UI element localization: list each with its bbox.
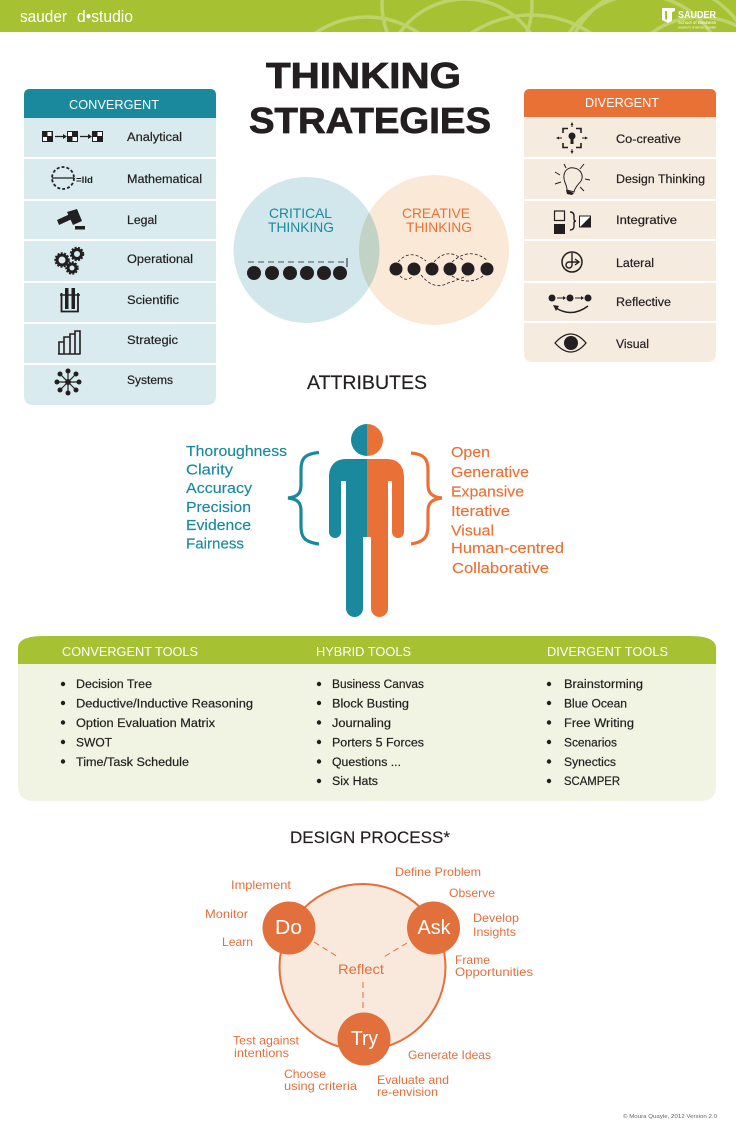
process step labels: Opportunities bbox=[455, 965, 533, 979]
column: divergent tools bbox=[547, 644, 668, 788]
attributes list: convergent: Fairness bbox=[186, 536, 244, 552]
circle: creative thinking bbox=[359, 175, 509, 325]
column: divergent tools: Brainstorming bbox=[564, 679, 643, 691]
row: lateral bbox=[562, 252, 654, 272]
column: hybrid tools: Six Hats bbox=[332, 776, 378, 788]
row: visual bbox=[555, 334, 649, 352]
attributes list: convergent: Clarity bbox=[186, 462, 234, 478]
heading: convergent: CONVERGENT bbox=[69, 97, 159, 112]
row: design thinking bbox=[555, 164, 705, 195]
attributes list: divergent: Iterative bbox=[451, 503, 510, 520]
row: strategic: Strategic bbox=[127, 335, 178, 347]
row: mathematical: =lld bbox=[76, 175, 93, 186]
row: reflective bbox=[548, 294, 671, 313]
heading: design process: DESIGN PROCESS* bbox=[290, 829, 451, 847]
title: STRATEGIES bbox=[249, 100, 491, 141]
column: convergent tools: Decision Tree bbox=[76, 679, 152, 691]
row: mathematical bbox=[52, 167, 202, 189]
column: divergent tools: DIVERGENT TOOLS bbox=[547, 644, 668, 659]
creative thinking looping dots bbox=[390, 254, 494, 286]
row: systems: Systems bbox=[127, 375, 173, 387]
title: THINKING bbox=[266, 55, 461, 96]
sauder d.studio wordmark: sauder bbox=[20, 7, 67, 26]
node: try bbox=[338, 1012, 390, 1066]
Sauder School of Business logo: School of Business bbox=[678, 20, 717, 25]
row: integrative bbox=[554, 211, 677, 234]
row: scientific bbox=[60, 288, 179, 312]
node: try: Try bbox=[351, 1028, 378, 1050]
column: hybrid tools: Block Busting bbox=[332, 698, 409, 710]
label: critical thinking: CRITICAL bbox=[269, 205, 332, 221]
label: reflect: Reflect bbox=[338, 961, 384, 977]
attributes list: divergent: Visual bbox=[451, 522, 494, 540]
sauder d.studio wordmark bbox=[20, 7, 133, 26]
heading: divergent: DIVERGENT bbox=[585, 95, 659, 110]
node: ask bbox=[407, 902, 460, 954]
column: divergent tools: Free Writing bbox=[564, 718, 634, 730]
row: reflective: Reflective bbox=[616, 297, 671, 309]
row: legal: Legal bbox=[127, 215, 157, 227]
column: convergent tools bbox=[61, 644, 253, 769]
row: co-creative bbox=[556, 122, 681, 154]
column: hybrid tools: Business Canvas bbox=[332, 679, 424, 691]
process step labels: Implement bbox=[231, 878, 292, 892]
column: hybrid tools: Questions ... bbox=[332, 757, 401, 769]
column: convergent tools: CONVERGENT TOOLS bbox=[62, 644, 198, 659]
row: lateral: Lateral bbox=[616, 258, 654, 270]
process step labels bbox=[205, 865, 533, 1099]
row: design thinking: Design Thinking bbox=[616, 174, 705, 186]
heading: attributes: ATTRIBUTES bbox=[307, 373, 427, 394]
column: hybrid tools bbox=[316, 644, 424, 788]
column: divergent tools: Blue Ocean bbox=[564, 698, 627, 710]
node: do: Do bbox=[275, 917, 302, 939]
label: creative thinking: THINKING bbox=[406, 219, 472, 235]
attributes list: divergent: Human-centred bbox=[451, 540, 564, 557]
column: divergent tools: Synectics bbox=[564, 757, 616, 769]
row: mathematical: Mathematical bbox=[127, 174, 202, 186]
person figure bbox=[329, 424, 404, 617]
brace: left bbox=[288, 452, 319, 544]
row: systems bbox=[54, 368, 173, 396]
attributes list: divergent bbox=[451, 444, 564, 577]
row: visual: Visual bbox=[616, 339, 649, 351]
brace: right bbox=[411, 453, 442, 544]
attributes list: divergent: Open bbox=[451, 444, 490, 461]
row: scientific: Scientific bbox=[127, 295, 179, 307]
circle: critical thinking bbox=[234, 177, 380, 323]
title bbox=[249, 55, 491, 141]
dashed connectors bbox=[314, 942, 407, 1010]
process step labels: using criteria bbox=[284, 1079, 357, 1093]
process step labels: Generate Ideas bbox=[408, 1048, 491, 1062]
row: co-creative: Co-creative bbox=[616, 134, 681, 146]
footer credit: © Moura Quayle, 2012 Version 2.0 bbox=[623, 1113, 717, 1120]
panel: tools bbox=[18, 636, 716, 801]
node: do bbox=[262, 902, 316, 954]
column: divergent tools: Scenarios bbox=[564, 738, 617, 750]
row: analytical bbox=[42, 131, 182, 144]
attributes list: convergent: Precision bbox=[186, 499, 251, 516]
main cycle circle bbox=[280, 884, 446, 1050]
row: operational bbox=[55, 248, 193, 274]
node: ask: Ask bbox=[418, 917, 451, 939]
process step labels: Learn bbox=[222, 935, 253, 949]
design process diagram bbox=[205, 865, 533, 1099]
header banner bbox=[0, 0, 736, 32]
attributes list: convergent: Thoroughness bbox=[186, 443, 287, 460]
column: divergent tools: SCAMPER bbox=[564, 776, 620, 788]
column: hybrid tools: HYBRID TOOLS bbox=[316, 644, 411, 659]
column: convergent tools: Deductive/Inductive Reasoning bbox=[76, 698, 253, 710]
attributes list: convergent: Accuracy bbox=[186, 480, 253, 497]
attributes list: convergent bbox=[186, 443, 287, 552]
label: critical thinking bbox=[268, 205, 334, 235]
row: analytical: Analytical bbox=[127, 132, 182, 144]
panel: convergent bbox=[24, 89, 216, 405]
row: legal bbox=[57, 209, 157, 230]
attributes list: divergent: Generative bbox=[451, 464, 529, 481]
process step labels: re-envision bbox=[377, 1085, 438, 1099]
process step labels: Evaluate and bbox=[377, 1073, 449, 1087]
column: convergent tools: Option Evaluation Matrix bbox=[76, 718, 215, 730]
row: strategic bbox=[58, 331, 178, 354]
process step labels: Choose bbox=[284, 1067, 326, 1081]
sauder d.studio wordmark: d•studio bbox=[77, 7, 133, 26]
attributes list: divergent: Expansive bbox=[451, 484, 524, 500]
attributes list: divergent: Collaborative bbox=[452, 560, 549, 577]
label: creative thinking: CREATIVE bbox=[402, 205, 470, 221]
process step labels: Develop bbox=[473, 911, 519, 925]
column: hybrid tools: Porters 5 Forces bbox=[332, 738, 424, 750]
column: convergent tools: SWOT bbox=[76, 738, 112, 750]
process step labels: intentions bbox=[234, 1046, 289, 1060]
Sauder School of Business logo bbox=[662, 8, 717, 30]
process step labels: Observe bbox=[449, 886, 495, 900]
process step labels: Test against bbox=[233, 1034, 300, 1048]
column: hybrid tools: Journaling bbox=[332, 718, 391, 730]
row: operational: Operational bbox=[127, 254, 193, 266]
label: critical thinking: THINKING bbox=[268, 219, 334, 235]
column: convergent tools: Time/Task Schedule bbox=[76, 757, 189, 769]
process step labels: Frame bbox=[455, 953, 490, 967]
venn diagram bbox=[234, 175, 509, 325]
row: integrative: Integrative bbox=[616, 215, 677, 227]
critical thinking linear dots bbox=[247, 258, 347, 280]
Sauder School of Business logo: SAUDER bbox=[678, 10, 717, 21]
process step labels: Define Problem bbox=[395, 865, 481, 879]
process step labels: Insights bbox=[473, 925, 516, 939]
process step labels: Monitor bbox=[205, 907, 248, 921]
Sauder School of Business logo: UNIVERSITY OF BRITISH COLUMBIA bbox=[678, 26, 716, 30]
attributes list: convergent: Evidence bbox=[186, 517, 251, 534]
panel: divergent bbox=[524, 89, 716, 362]
label: creative thinking bbox=[402, 205, 472, 235]
